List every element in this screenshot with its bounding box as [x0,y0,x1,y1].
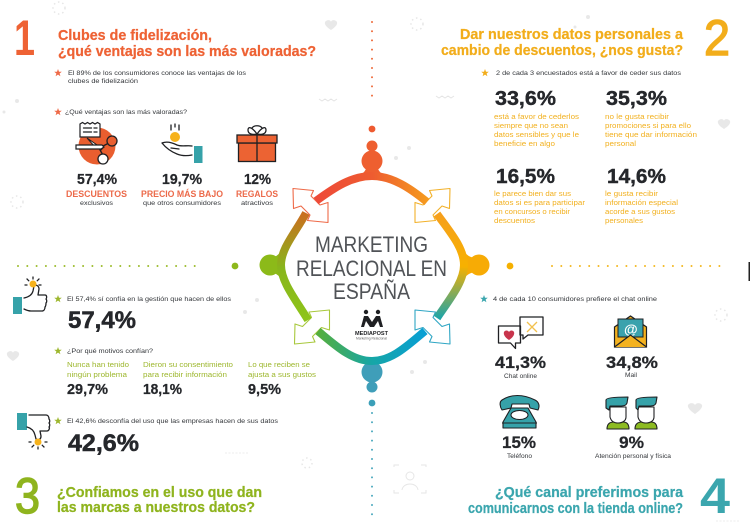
icon: chat bubbles [498,317,543,348]
stat: 33,6%: 33,6% [495,87,556,110]
stat: 16,5%: en concursos o recibir [494,209,571,216]
stat: mail: Mail [625,372,637,379]
star bullet [54,347,62,354]
reason: consentimiento: Dieron su consentimiento [143,362,233,369]
reason: consentimiento [143,362,233,398]
central title: RELACIONAL EN [296,256,447,281]
reason: gustos: 9,5% [248,382,281,398]
stat: teléfono: Teléfono [507,453,532,460]
stat: regalos [236,172,278,207]
intro text: 2 de cada 3 encuestados está a favor de ceder sus datos [496,70,682,77]
panel 2: datos personales [441,10,730,225]
heading 3 [57,484,262,516]
stat: 33,6%: beneficie en algo [494,141,555,148]
stat: mail: 34,8% [606,354,658,372]
star bullet [481,69,489,76]
stat: chat online: Chat online [504,373,537,380]
heading 4: comunicarnos con la tienda online? [468,500,683,517]
stat: 14,6%: acorde a sus gustos [605,209,676,216]
reason: consentimiento: 18,1% [143,382,182,398]
icon: hand with coin [162,124,202,163]
heading 3: ¿Confiamos en el uso que dan [57,484,262,501]
stat: 33,6%: está a favor de cederlos [494,114,580,121]
panel 4: canales [468,295,730,524]
stat: mail [606,354,658,379]
stat: 14,6%: personales [605,218,644,225]
stat: 16,5% [494,165,586,225]
icon: two people [606,397,657,429]
stat: regalos: 12% [244,172,271,188]
stat: atención personal: 9% [619,434,644,452]
arrow: bottom right [415,310,450,344]
heading 1: Clubes de fidelización, [58,27,212,44]
central title [296,232,447,304]
reason: sin problemas [67,362,129,398]
heading 1: ¿qué ventajas son las más valoradas? [58,43,316,60]
intro text: 4 de cada 10 consumidores prefiere el chat online [493,296,657,303]
stat: 35,3%: tiene que dar información [605,132,697,139]
logo: Mediapost: Marketing Relacional [356,336,387,340]
heading 3: las marcas a nuestros datos? [57,499,255,516]
stat: 14,6% [605,165,679,225]
ring arc: left [281,213,308,320]
stat: 33,6%: siempre que no sean [494,123,568,130]
reason: sin problemas: ningún problema [67,372,127,379]
star bullet [54,295,62,302]
stat: precio más bajo: PRECIO MÁS BAJO [141,189,223,200]
icon: thumb down [17,413,50,449]
stat: 33,6% [494,87,580,148]
reason: gustos [248,362,317,398]
ring connector dots [232,126,513,406]
ring knob: top [352,140,392,178]
stat: descuentos: DESCUENTOS [66,189,127,200]
arrow: top left [293,188,328,222]
stat: atención personal: Atención personal y física [595,453,671,460]
star bullet [54,108,62,115]
big stat 42,6%: 42,6% [68,430,139,457]
logo: Mediapost: MEDIAPOST [355,331,389,337]
ring arc: bottom [318,331,425,361]
stat: atención personal [595,434,671,460]
heading 4: ¿Qué canal preferimos para [495,484,684,501]
stat: 16,5%: datos si es para participar [494,200,586,207]
heading 2: cambio de descuentos, ¿nos gusta? [441,42,683,59]
stat: 14,6%: información especial [605,200,679,207]
stat: descuentos: exclusivos [80,200,114,207]
question text: ¿Por qué motivos confían? [67,348,153,355]
central title: MARKETING [315,232,428,257]
distrust text: El 42,6% desconfía del uso que las empresas hacen de sus datos [67,418,279,425]
stat: 14,6%: le gusta recibir [605,191,659,198]
intro text: El 89% de los consumidores conoce las ventajas de los [68,70,247,77]
stat: precio más bajo: que otros consumidores [143,200,222,207]
question text: ¿Qué ventajas son las más valoradas? [65,109,187,116]
number 3: 3 [15,468,40,524]
stat: 35,3%: personal [605,141,637,148]
stat: descuentos [66,172,127,207]
trust text: El 57,4% sí confía en la gestión que hacen de ellos [67,296,232,303]
stat: precio más bajo [141,172,223,207]
heading 4 [468,484,684,517]
reason: sin problemas: Nunca han tenido [67,362,129,369]
icon: telephone [500,396,539,428]
heading 2: Dar nuestros datos personales a [460,26,684,43]
ring knob: bottom [352,358,392,392]
stat: 16,5%: 16,5% [496,165,555,188]
stat: 35,3% [605,87,697,148]
stat: 16,5%: le parece bien dar sus [494,191,572,198]
heading 1 [58,27,316,60]
arrow: bottom left [294,310,330,344]
intro text [68,70,247,85]
ring knob: right [461,243,490,287]
star bullet [54,69,62,76]
reason: gustos: ajusta a sus gustos [248,372,317,379]
icon: gift box [237,126,277,162]
stat: 16,5%: descuentos [494,218,536,225]
panel 1: clubes de fidelización [14,10,316,207]
stat: 35,3%: no le gusta recibir [605,114,670,121]
edge mark [748,262,750,281]
stat: chat online: 41,3% [495,354,546,372]
stat: regalos: REGALOS [236,189,278,200]
stat: 14,6%: 14,6% [607,165,666,188]
stat: teléfono [502,434,536,460]
number 4: 4 [700,468,730,524]
icon: envelope: @ [624,321,638,337]
central title: ESPAÑA [333,279,410,304]
stat: descuentos: 57,4% [77,172,117,188]
stat: regalos: atractivos [241,200,274,207]
panel 3: confianza [13,277,317,524]
stat: precio más bajo: 19,7% [162,172,202,188]
stat: chat online [495,354,546,380]
ring knob: left [260,243,284,287]
logo: Mediapost [355,310,389,340]
star bullet [480,295,488,302]
central ring diagram [232,126,513,406]
number 2: 2 [704,10,730,66]
intro text: clubes de fidelización [68,78,138,85]
icon: envelope [614,316,646,347]
reason: gustos: Lo que reciben se [248,362,310,369]
icon: scissors and coupon [76,122,117,164]
stat: 33,6%: datos sensibles y que le [494,132,579,139]
stat: 35,3%: promociones si para ello [605,123,691,130]
star bullet [54,417,62,424]
ring arc: right [437,214,464,318]
ring arc: top [316,176,427,202]
reason: sin problemas: 29,7% [67,382,108,398]
arrow: top right [415,188,450,222]
icon: thumb up [13,277,47,314]
stat: 35,3%: 35,3% [606,87,667,110]
number 1: 1 [14,10,35,66]
reason: consentimiento: para recibir información [143,372,227,379]
stat: teléfono: 15% [502,434,536,452]
big stat 57,4%: 57,4% [68,307,136,334]
heading 2 [441,26,684,59]
